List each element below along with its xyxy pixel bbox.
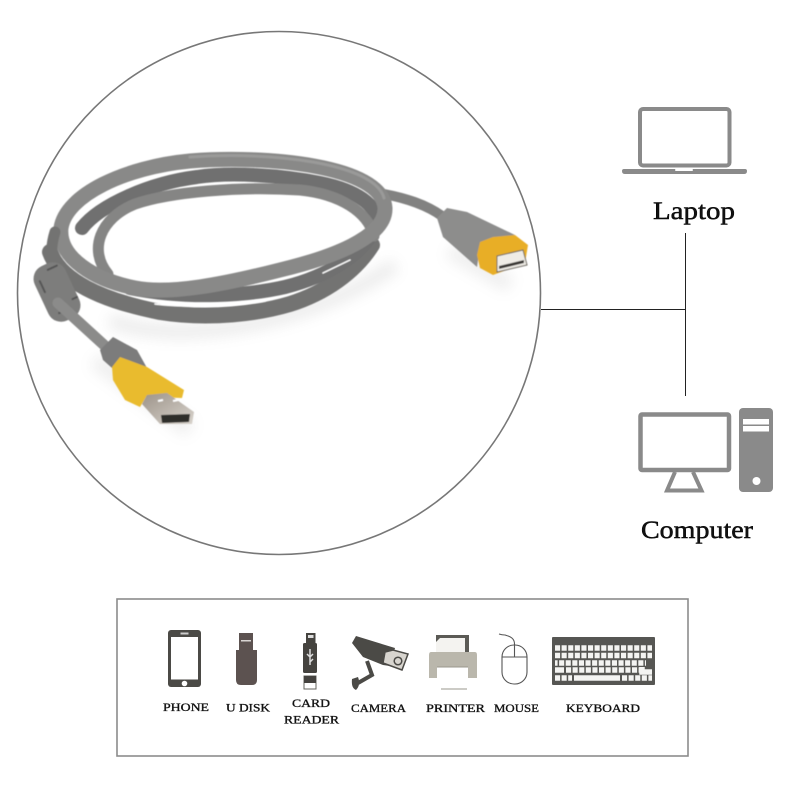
label: card reader (284, 696, 339, 726)
cable: highlight on front loop (190, 156, 384, 198)
label: Laptop: Laptop (653, 198, 735, 225)
icon: U disk (236, 633, 257, 685)
cable: highlight gap (155, 260, 350, 306)
ferrite core (29, 258, 85, 326)
label: camera: CAMERA (351, 701, 406, 715)
icon: security camera (352, 636, 408, 690)
cable: tail to USB-A plug (58, 303, 104, 345)
icon: printer (429, 635, 477, 689)
illustration: USB extension cable (29, 156, 528, 424)
icon: laptop (622, 109, 747, 174)
cable: middle front strand (82, 175, 376, 295)
icon: phone (168, 630, 201, 687)
label: card reader: CARD (292, 696, 330, 710)
icon: computer (640, 408, 773, 492)
icon: mouse (499, 634, 527, 684)
cable: inner light strand (98, 189, 374, 274)
panel: compatible devices (117, 599, 688, 756)
label: card reader: READER (284, 712, 339, 726)
cable: lower strand (50, 245, 372, 316)
label: keyboard: KEYBOARD (566, 701, 640, 715)
cable: left drop to ferrite (52, 232, 55, 266)
label: printer: PRINTER (426, 701, 485, 715)
label: Computer: Computer (641, 517, 754, 544)
icon: keyboard (552, 637, 655, 685)
cable shadows (95, 250, 510, 430)
icon: card reader (303, 633, 317, 689)
USB-A plug (100, 337, 194, 424)
cable: right tail (384, 194, 442, 216)
cable: front loop (61, 159, 385, 290)
label: U disk: U DISK (226, 700, 270, 714)
label: phone: PHONE (163, 700, 209, 714)
label: mouse: MOUSE (494, 701, 539, 715)
connector lines (541, 233, 686, 396)
USB-A socket connector (437, 208, 528, 275)
panel: product photo circle (18, 32, 540, 554)
